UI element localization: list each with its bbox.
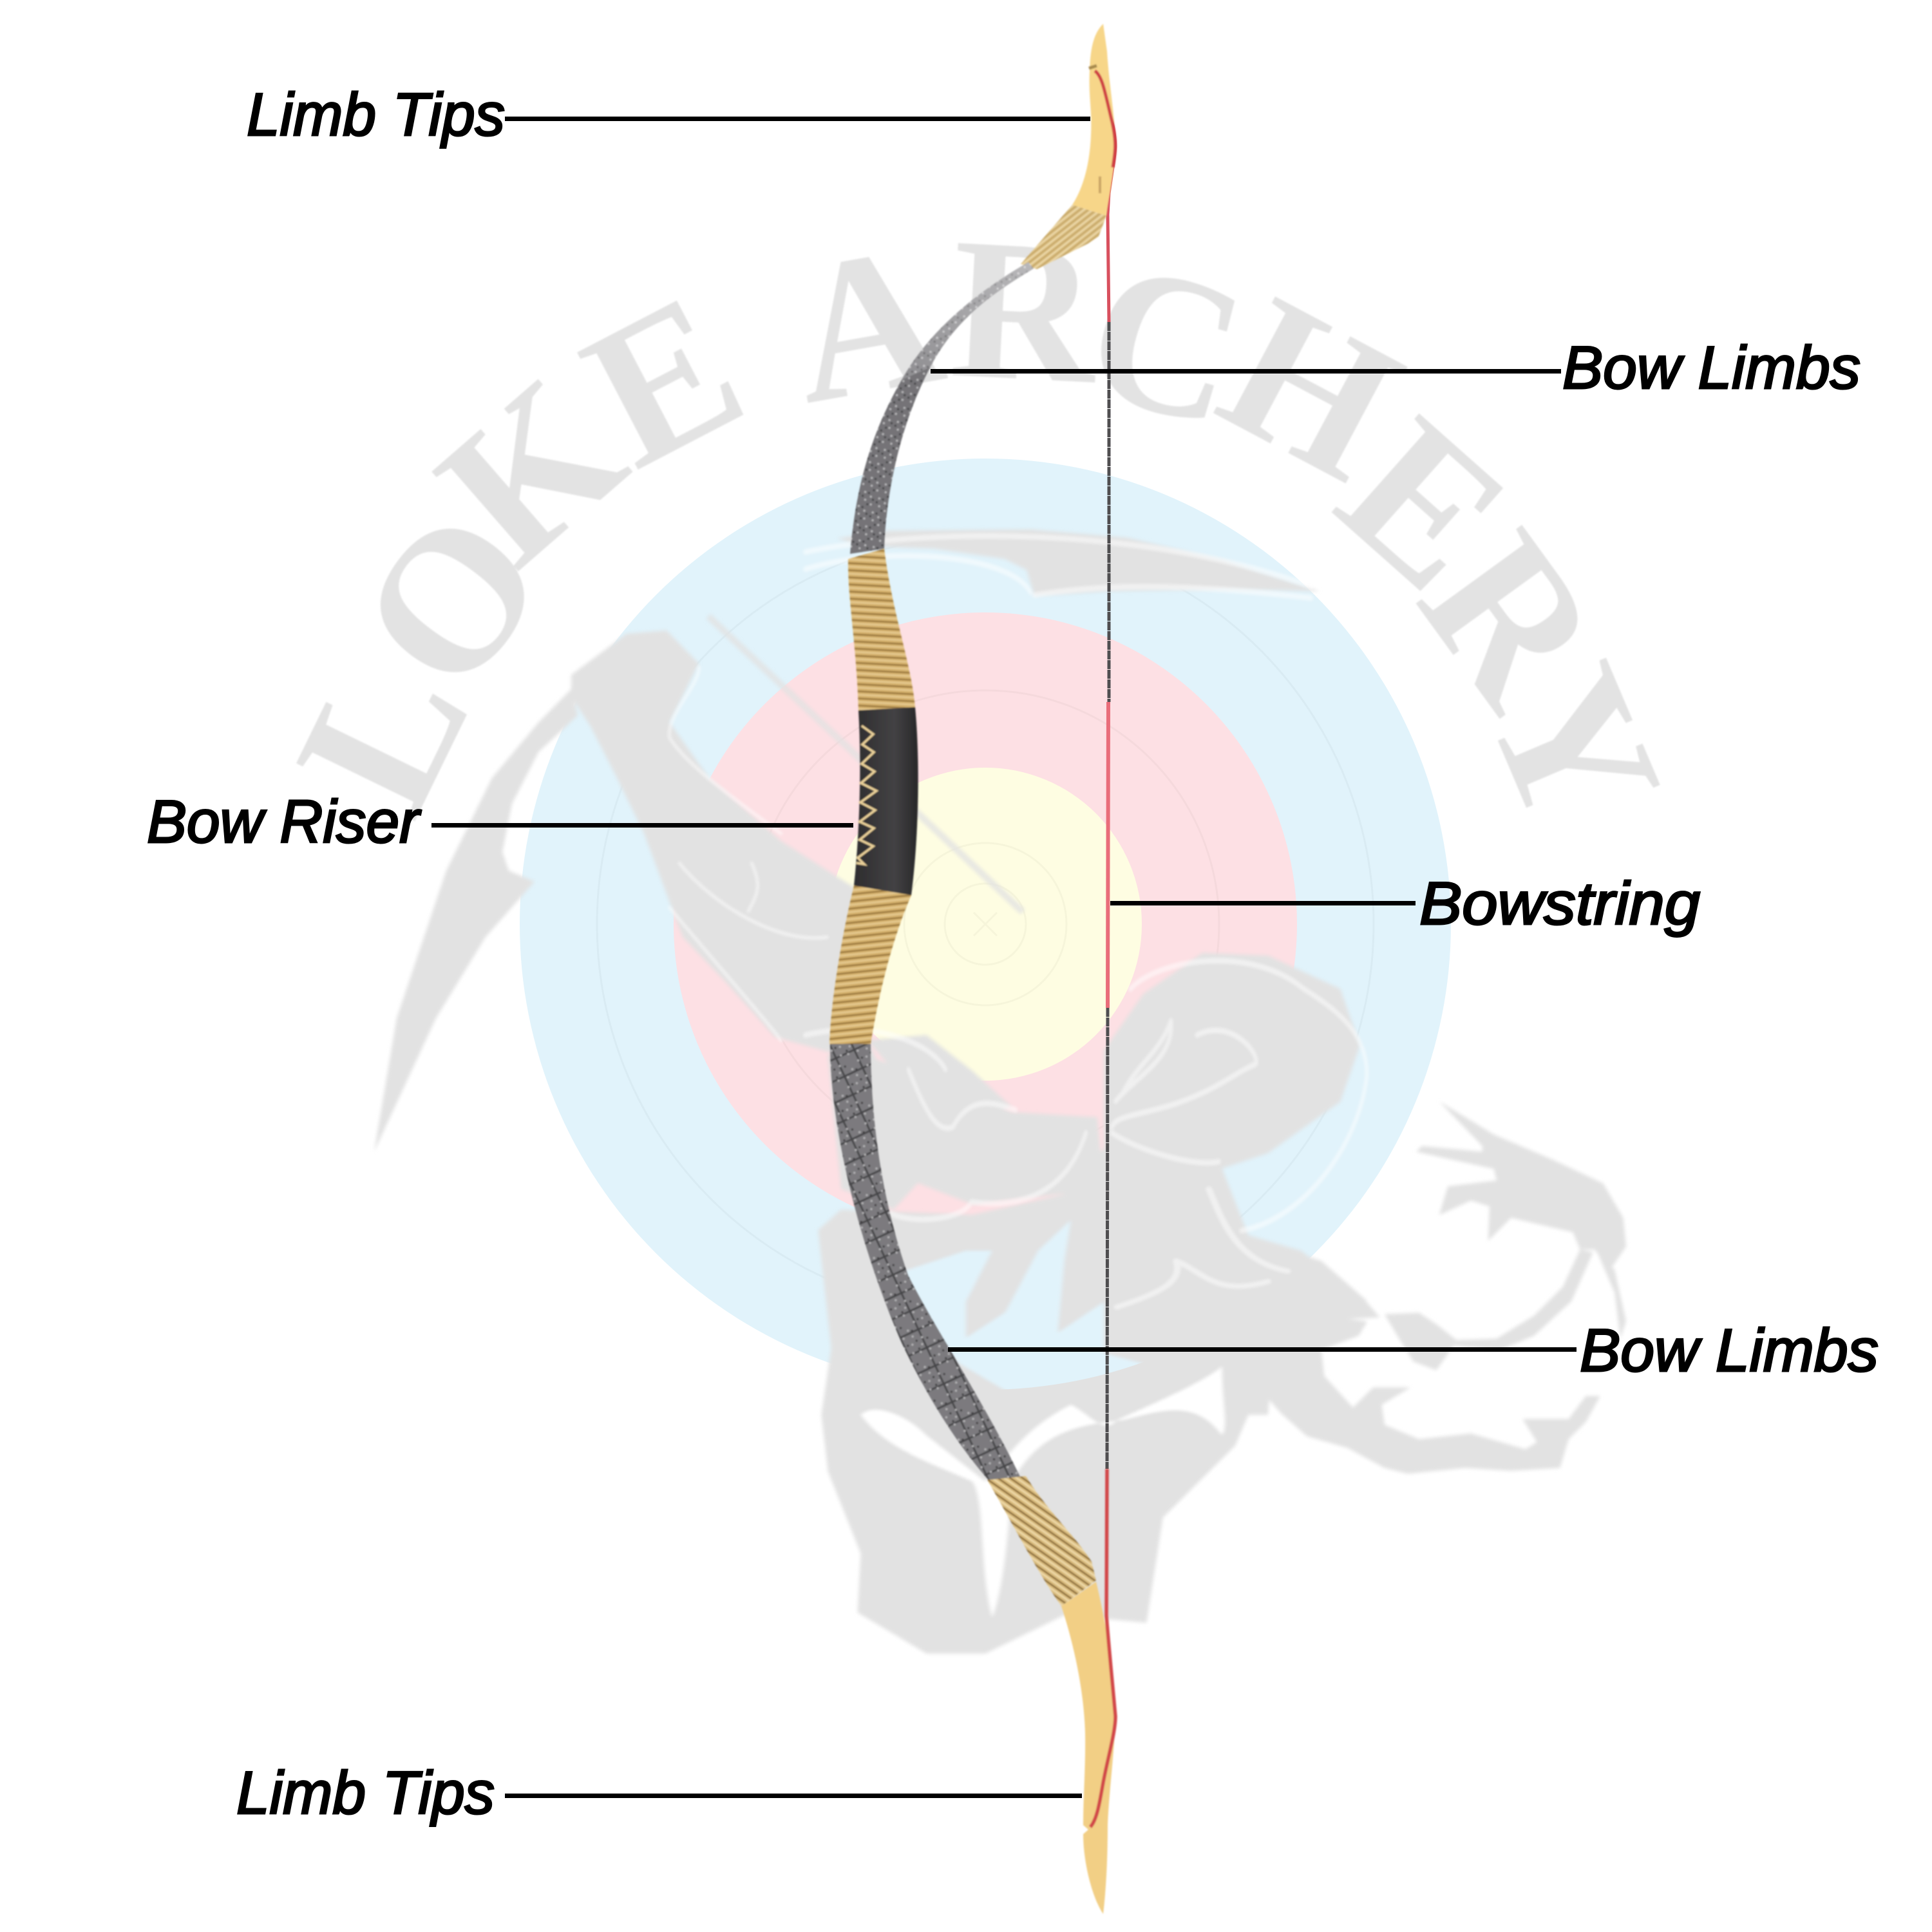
label: top limb tips: Limb Tips [247,80,505,148]
watermark white gaps [861,1366,1225,1618]
upper limb tip [1072,24,1115,216]
red serving upper and tip cord [1095,71,1115,322]
leader line: bottom limb tips [505,1794,1082,1798]
leader line: bow riser [431,823,853,828]
watermark arc text: R [1378,494,1645,745]
watermark blue gaps in lower body [907,1222,1141,1390]
upper limb [850,262,1034,554]
watermark arc text [252,195,1705,857]
label: lower bow limbs: Bow Limbs [1580,1316,1879,1384]
bow [829,24,1115,1914]
leader line: lower bow limbs [948,1347,1577,1352]
leather grip [854,707,918,895]
lower limb [830,1044,1021,1484]
watermark arc text: E [552,250,775,510]
dark lower string section [1107,1008,1108,1469]
label: upper bow limbs: Bow Limbs [1562,334,1861,401]
leader line: bowstring [1110,901,1416,905]
grip stitching [857,726,876,864]
lower string cord [1090,1469,1115,1827]
watermark arc text: Y [1443,636,1705,857]
leader line: top limb tips [505,117,1090,121]
watermark light outlines [669,536,1367,1307]
upper tip wrapping [1021,205,1106,269]
watermark arc text: H [1189,252,1433,524]
lower limb tip [1061,1582,1115,1914]
watermark arc text: L [252,625,511,844]
watermark reaper silhouette [374,529,1626,1654]
leader line: upper bow limbs [931,369,1561,374]
bowstring [1095,71,1115,1469]
watermark arc text: R [945,195,1105,426]
lower tip wrapping [987,1476,1096,1606]
watermark arc text: E [1300,375,1549,632]
watermark: Loke Archery logo [252,195,1705,1654]
background target [520,459,1451,1390]
watermark arc text: K [398,335,663,607]
lower riser wrapping [829,886,911,1044]
dark upper string section [1108,322,1110,702]
label: bowstring: Bowstring [1419,869,1700,937]
label: bottom limb tips: Limb Tips [236,1759,495,1826]
watermark arc text: A [775,201,957,446]
watermark arc text: O [314,469,587,729]
upper riser wrapping [848,549,915,710]
label: bow riser: Bow Riser [147,788,422,855]
watermark arc text: C [1066,216,1266,470]
